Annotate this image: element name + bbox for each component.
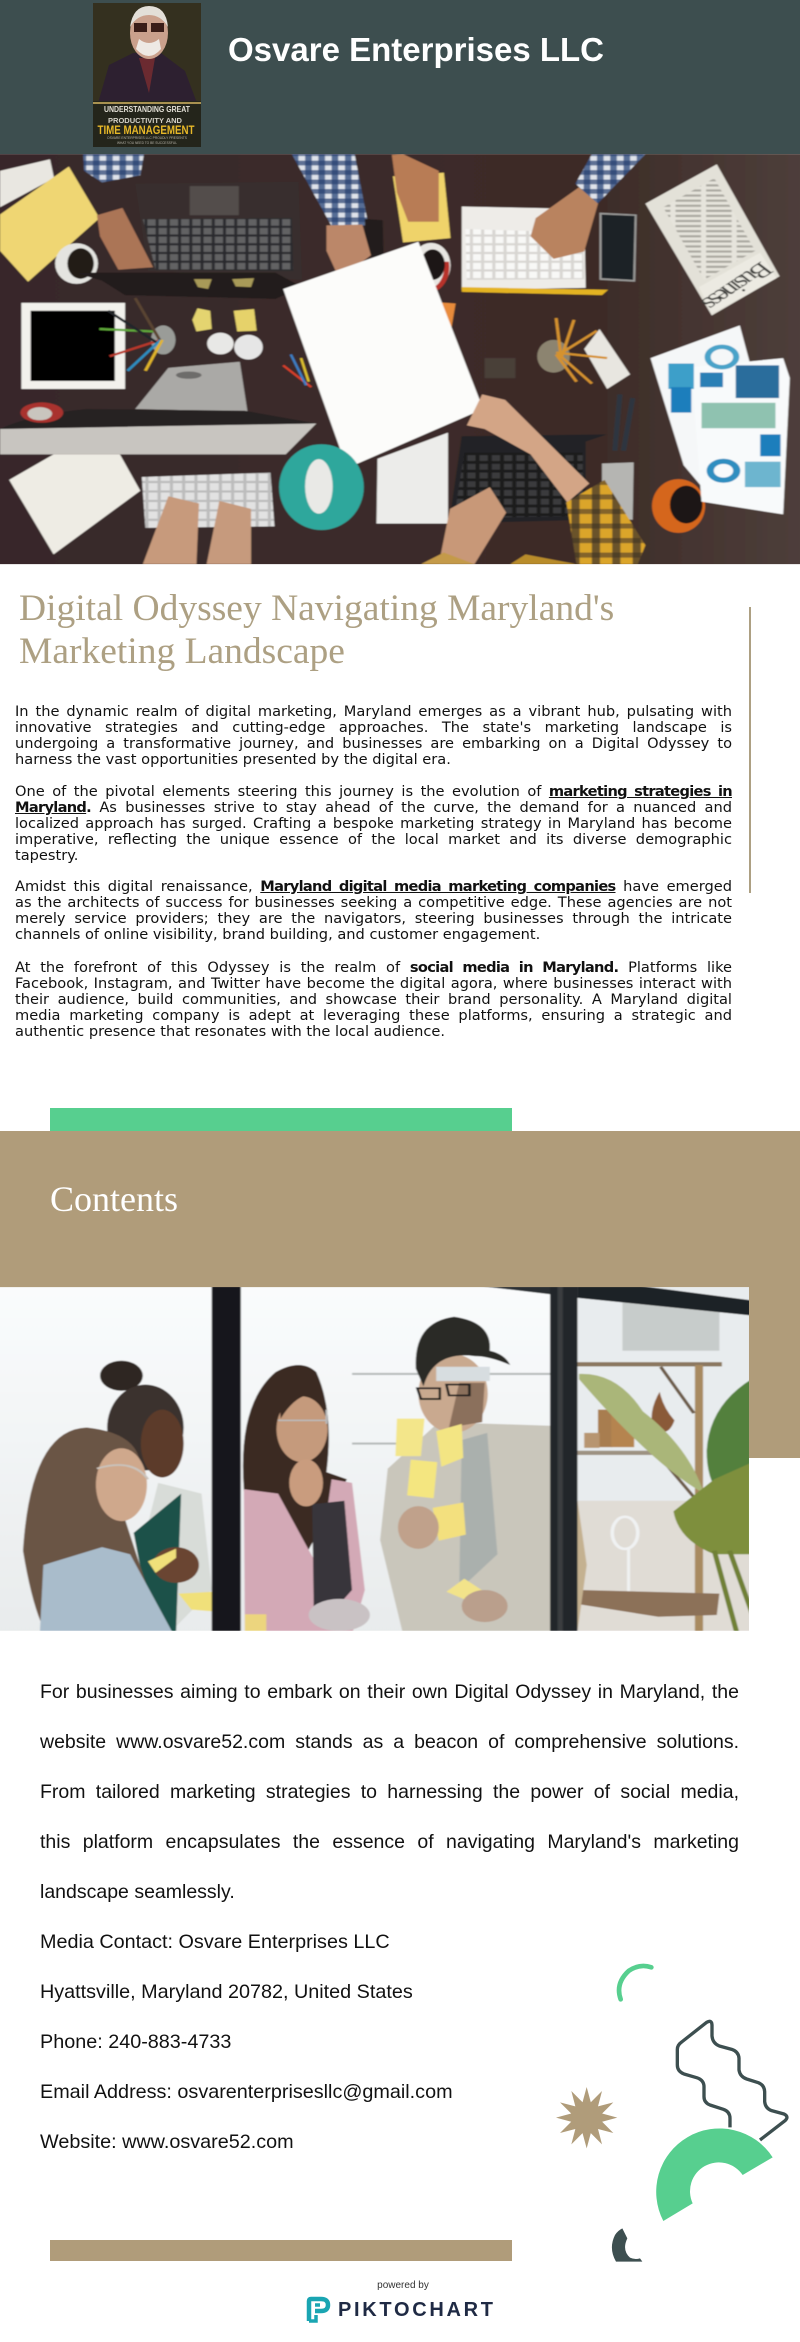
paragraph 1: undergoing a transformative journey, and businesses are embarking on a Digital Odyssey to	[15, 735, 732, 752]
paragraph 2: localized approach has surged. Crafting a bespoke marketing strategy in Maryland has become	[15, 815, 732, 832]
logo image: book cover portrait	[93, 3, 201, 147]
main heading	[19, 588, 614, 672]
closing paragraph: From tailored marketing strategies to harnessing the power of social media,	[40, 1781, 739, 1803]
paragraph 1	[15, 703, 732, 768]
paragraph 3: as the architects of success for businesses seeking a competitive edge. These agencies are not	[15, 894, 732, 911]
paragraph 3	[15, 878, 732, 943]
closing paragraph	[40, 1681, 739, 1903]
paragraph 1: In the dynamic realm of digital marketing, Maryland emerges as a vibrant hub, pulsating with	[15, 703, 732, 720]
paragraph 4	[15, 959, 732, 1040]
icon: tan starburst	[556, 2087, 617, 2148]
piktochart logo	[306, 2296, 493, 2323]
paragraph 4: Facebook, Instagram, and Twitter have become the digital agora, where businesses interact with	[15, 975, 732, 992]
decorative shapes	[556, 1964, 789, 2262]
paragraph 2: Maryland. As businesses strive to stay ahead of the curve, the demand for a nuanced and	[15, 799, 732, 816]
paragraph 4: At the forefront of this Odyssey is the realm of social media in Maryland. Platforms like	[15, 959, 732, 976]
paragraph 3: Amidst this digital renaissance, Maryland digital media marketing companies have emerged	[15, 878, 732, 895]
paragraph 2: One of the pivotal elements steering this journey is the evolution of marketing strategies in	[15, 783, 732, 800]
green accent bar	[50, 1108, 512, 1131]
paragraph 3: channels of online visibility, brand building, and customer engagement.	[15, 926, 540, 943]
icon: large green half ring	[656, 2128, 773, 2221]
media contact block: Phone: 240-883-4733	[40, 2031, 231, 2053]
paragraph 4: authentic presence that resonates with the local audience.	[15, 1023, 445, 1040]
closing paragraph: this platform encapsulates the essence of navigating Maryland's marketing	[40, 1831, 739, 1853]
tan footer bar	[50, 2240, 512, 2261]
logo image: book cover portrait: PRODUCTIVITY AND	[108, 116, 183, 125]
paragraph 4: their audience, build communities, and showcase their brand personality. A Maryland digital	[15, 991, 732, 1008]
hero photo: team working around a desk: Business	[695, 257, 779, 316]
media contact block	[40, 1931, 453, 2153]
icon: dark half ring	[612, 2228, 642, 2262]
main heading: Digital Odyssey Navigating Maryland's	[19, 588, 614, 629]
icon: thin green arc	[619, 1966, 651, 1999]
media contact block: Hyattsville, Maryland 20782, United States	[40, 1981, 413, 2003]
media contact block: Media Contact: Osvare Enterprises LLC	[40, 1931, 390, 1953]
paragraph 2: tapestry.	[15, 847, 78, 864]
powered by credit: powered by	[377, 2280, 429, 2291]
paragraph 3: merely service providers; they are the navigators, steering businesses through the intricate	[15, 910, 732, 927]
team photo: colleagues at a glass wall with sticky notes	[0, 1287, 749, 1631]
hero photo: team working around a desk	[0, 154, 800, 564]
main heading: Marketing Landscape	[19, 631, 345, 672]
closing paragraph: landscape seamlessly.	[40, 1881, 235, 1903]
vertical accent rule	[749, 607, 751, 893]
media contact block: Email Address: osvarenterprisesllc@gmail.com	[40, 2081, 453, 2103]
logo image: book cover portrait: WHAT YOU NEED TO BE SUCCESSFUL	[117, 140, 178, 145]
logo image: book cover portrait: UNDERSTANDING GREAT	[104, 105, 190, 114]
paragraph 1: innovative strategies and cutting-edge approaches. The state's marketing landscape is	[15, 719, 732, 736]
paragraph 1: harness the vast opportunities presented by the digital era.	[15, 751, 451, 768]
media contact block: Website: www.osvare52.com	[40, 2131, 294, 2153]
paragraph 2	[15, 783, 732, 864]
closing paragraph: website www.osvare52.com stands as a beacon of comprehensive solutions.	[40, 1731, 739, 1753]
piktochart logo: PIKTOCHART	[338, 2299, 493, 2321]
header band	[0, 0, 800, 154]
company name: Osvare Enterprises LLC	[228, 31, 604, 68]
contents heading: Contents	[50, 1179, 178, 1219]
tan contents panel	[0, 1131, 800, 1458]
paragraph 2: imperative, reflecting the unique essence of the local market and its diverse demographic	[15, 831, 732, 848]
closing paragraph: For businesses aiming to embark on their own Digital Odyssey in Maryland, the	[40, 1681, 739, 1703]
icon: dark squiggle outline	[677, 2021, 787, 2140]
paragraph 4: media marketing company is adept at leveraging these platforms, ensuring a strategic and	[15, 1007, 732, 1024]
